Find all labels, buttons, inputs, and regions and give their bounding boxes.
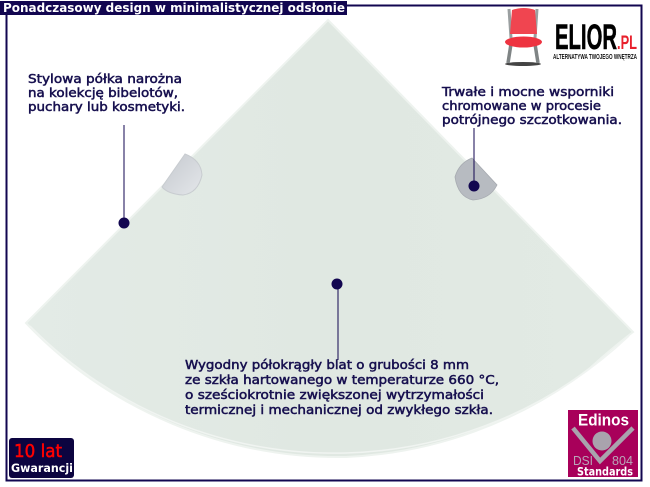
icon: left chrome bracket [162,154,202,195]
badge: Edinos standards: Standards [577,464,633,478]
text block: shelf use: Stylowa półka narożna [28,72,182,86]
callout: centre marker [332,278,342,360]
text block: brackets: chromowane w procesie [442,99,601,113]
text block: brackets: potrójnego szczotkowania. [442,113,622,127]
header bar: Ponadczasowy design w minimalistycznej odsłonie [3,0,345,15]
badge: Edinos standards: Edinos [578,410,629,430]
badge: Edinos standards [568,410,638,478]
icon: red chair [505,8,542,66]
text block: brackets: Trwałe i mocne wsporniki [441,85,614,99]
text block: tempered glass top: ze szkła hartowanego w temperaturze 660 °C, [185,373,499,387]
badge: 10 year warranty: Gwarancji [11,461,73,475]
text block: tempered glass top: Wygodny półokrągły blat o grubości 8 mm [185,358,469,372]
text block: tempered glass top: termicznej i mechanicznej od zwykłego szkła. [185,403,493,417]
logo: Elior.pl: .PL [617,33,637,54]
badge: 10 year warranty: 10 lat [14,441,62,462]
text block: shelf use: puchary lub kosmetyki. [28,100,185,114]
callout: left marker [118,125,130,228]
text block: shelf use: na kolekcję bibelotów, [28,86,178,100]
text block: tempered glass top: o sześciokrotnie zwiększonej wytrzymałości [185,388,484,402]
callout: right marker [468,128,480,192]
text block: tempered glass top [185,358,499,417]
icon: right chrome bracket [455,158,497,200]
text block: shelf use [28,72,185,114]
badge: Edinos standards: 804 [612,453,633,468]
badge: 10 year warranty [9,438,74,478]
text block: brackets [441,85,622,127]
logo: Elior.pl [505,8,637,66]
badge: Edinos standards: DSI [573,453,593,468]
